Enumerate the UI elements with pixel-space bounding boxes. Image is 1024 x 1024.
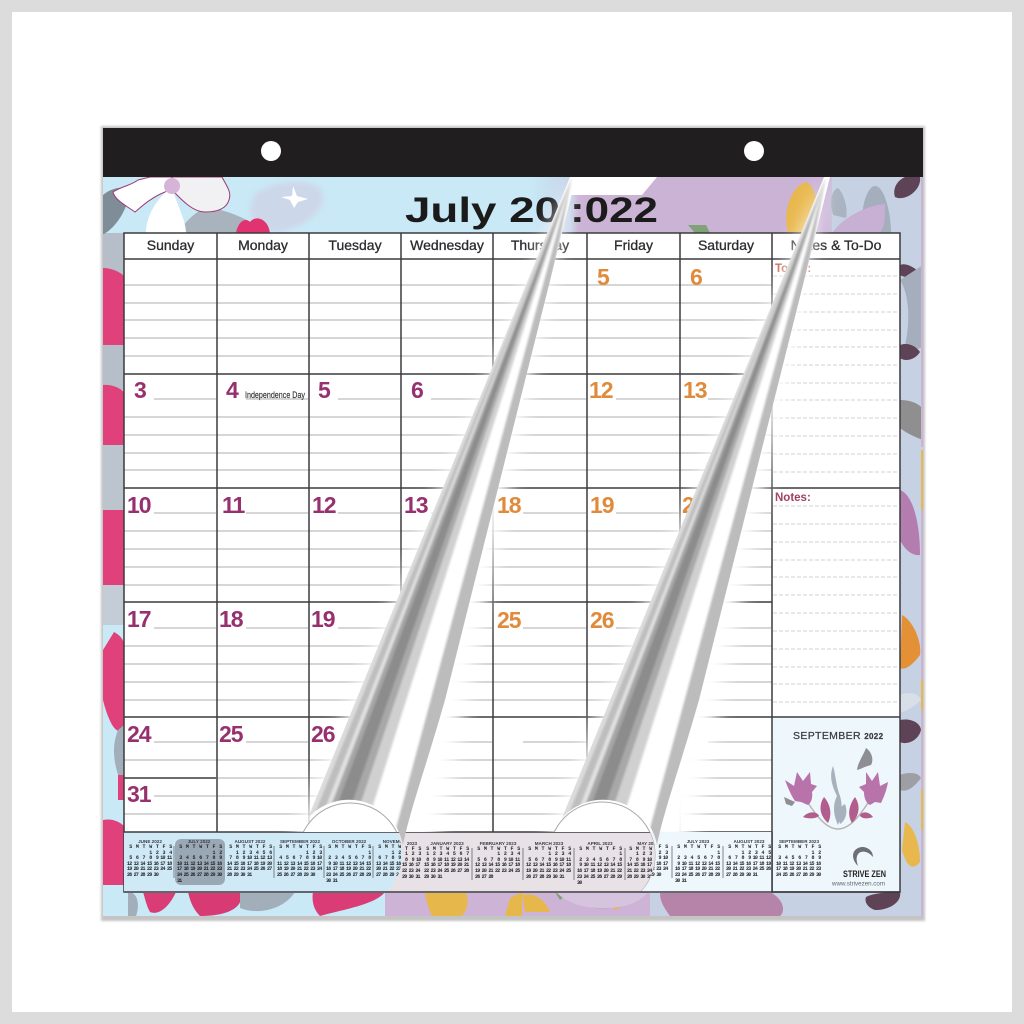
December 2022 tail: 2023 <box>407 841 418 846</box>
July highlight <box>175 839 225 885</box>
day numbers: 24 <box>127 721 152 747</box>
day numbers: 26 <box>311 721 335 747</box>
June 2022: S M T W T F S <box>127 844 172 850</box>
November 2022: 27 28 29 30 <box>376 872 401 878</box>
July 2022: 1 2 <box>177 850 222 856</box>
calendar tail before July: S M T W T F S <box>623 844 668 850</box>
March 2023: 26 27 28 29 30 31 <box>526 874 565 880</box>
November 2022 <box>376 840 401 876</box>
calendar tail before July: 18 19 20 21 22 23 24 <box>623 866 668 872</box>
January 2023: S M T W T F S <box>424 846 469 852</box>
July 2023: 2 3 4 5 6 7 8 <box>675 855 720 861</box>
Strive Zen logo: STRIVE ZEN <box>843 869 886 879</box>
October 2022: 23 24 25 26 27 28 29 <box>326 872 371 878</box>
September 2022: 25 26 27 28 29 30 <box>277 872 316 878</box>
weekday headers: Sunday <box>147 237 194 253</box>
day numbers: 25 <box>219 721 244 747</box>
strip bottom border <box>124 891 772 893</box>
March 2023: 12 13 14 15 16 17 18 <box>526 862 571 868</box>
December 2022 tail: 29 30 31 <box>402 874 421 880</box>
September 2023 mini calendar: 17 18 19 20 21 22 23 <box>776 866 821 872</box>
day numbers: 31 <box>127 781 152 807</box>
September 2022: S M T W T F S <box>277 844 322 850</box>
lens circle first curl <box>303 802 398 832</box>
September 2022: 18 19 20 21 22 23 24 <box>277 866 322 872</box>
day numbers: 17 <box>127 606 151 632</box>
August 2022: 28 29 30 31 <box>227 872 252 878</box>
day numbers: 3 <box>134 377 146 403</box>
December 2022 tail: 8 9 10 <box>405 857 421 863</box>
July 2023: 1 <box>675 850 720 856</box>
October 2022: 9 10 11 12 13 14 15 <box>326 861 371 867</box>
day numbers: 4 <box>226 377 239 403</box>
day numbers: 13 <box>404 492 428 518</box>
April 2023: 16 17 18 19 20 21 22 <box>577 868 622 874</box>
bottom margin florals <box>128 892 900 916</box>
title: July 20 <box>405 191 560 230</box>
day numbers: 11 <box>222 492 246 518</box>
January 2023: 8 9 10 11 12 13 14 <box>424 857 469 863</box>
August 2022: AUGUST 2022 <box>235 839 266 844</box>
July 2022 <box>177 839 222 884</box>
June 2022: JUNE 2022 <box>138 839 162 844</box>
July 2023: 23 24 25 26 27 28 29 <box>675 872 720 878</box>
lens circle second curl <box>549 802 655 908</box>
day numbers: 12 <box>312 492 336 518</box>
title <box>405 191 658 230</box>
title: :022 <box>570 191 658 230</box>
April 2023: 1 <box>577 851 622 857</box>
day numbers: 10 <box>127 492 151 518</box>
July 2023: 16 17 18 19 20 21 22 <box>675 866 720 872</box>
day numbers: 25 <box>497 607 522 633</box>
April 2023: 9 10 11 12 13 14 15 <box>577 862 622 868</box>
to-do and notes labels: To-Do: <box>775 263 811 275</box>
punch hole left <box>261 141 281 161</box>
black binding band <box>103 128 923 177</box>
October 2022: 2 3 4 5 6 7 8 <box>326 855 371 861</box>
January 2023: 15 16 17 18 19 20 21 <box>424 862 469 868</box>
September 2023 mini calendar: SEPTEMBER 2023 <box>779 839 819 844</box>
August 2022 <box>227 839 272 878</box>
February 2023: 12 13 14 15 16 17 18 <box>475 862 520 868</box>
October 2022: S M T W T F S <box>326 844 371 850</box>
November 2022: 20 21 22 23 <box>376 866 401 872</box>
December 2022 tail: T F S <box>405 846 421 852</box>
day numbers: 13 <box>683 377 707 403</box>
March 2023: S M T W T F S <box>526 846 571 852</box>
December 2022 tail: 22 23 24 <box>402 868 421 874</box>
April 2023: 23 24 25 26 27 28 29 <box>577 874 622 880</box>
first page curl <box>308 177 575 844</box>
August 2022: S M T W T F S <box>227 844 272 850</box>
punch hole right <box>744 141 764 161</box>
September 2022: SEPTEMBER 2022 <box>280 839 320 844</box>
day numbers: 6 <box>690 264 702 290</box>
May 2023: 21 22 23 24 <box>627 868 652 874</box>
August 2022: 21 22 23 24 25 26 27 <box>227 866 272 872</box>
September 2023 mini calendar <box>776 839 821 878</box>
April 2023: S M T W T F S <box>577 846 622 852</box>
August 2023: 13 14 15 16 17 18 19 <box>726 861 771 867</box>
August 2023: S M T W T F S <box>726 844 771 850</box>
July 2022: 31 <box>177 878 182 884</box>
day numbers: 5 <box>597 264 610 290</box>
day numbers: 20 <box>682 492 706 518</box>
left margin florals <box>103 188 130 885</box>
August 2023: 20 21 22 23 24 25 26 <box>726 866 771 872</box>
day numbers <box>127 264 707 807</box>
September 2022: 4 5 6 7 8 9 10 <box>277 855 322 861</box>
calendar tail before July: 25 26 27 28 29 30 <box>623 872 662 878</box>
December 2022 tail: 15 16 17 <box>402 862 421 868</box>
May 2023: 7 8 9 10 <box>627 857 652 863</box>
mini calendar strip: right section <box>124 832 772 893</box>
July 2022: 3 4 5 6 7 8 9 <box>177 855 222 861</box>
calendar background artwork <box>103 177 923 916</box>
mini calendar strip: pale section <box>124 832 774 893</box>
panel heading: SEPTEMBER 2022 <box>793 730 884 742</box>
August 2022: 14 15 16 17 18 19 20 <box>227 861 272 867</box>
day numbers: Independence Day <box>245 390 305 400</box>
March 2023: 5 6 7 8 9 10 11 <box>526 857 571 863</box>
September 2022 <box>277 839 322 878</box>
December 2022 tail <box>402 841 421 880</box>
October 2022: 30 31 <box>326 878 338 884</box>
May 2023: 14 15 16 17 <box>627 862 652 868</box>
day numbers: 12 <box>589 377 613 403</box>
February 2023: 1 2 3 4 <box>475 851 520 857</box>
day numbers: 5 <box>318 377 331 403</box>
calendar tail before July <box>623 844 668 878</box>
September panel <box>772 718 900 892</box>
top-left white flower <box>113 177 308 233</box>
June 2022: 26 27 28 29 30 <box>127 872 159 878</box>
September 2023 mini calendar: 3 4 5 6 7 8 9 <box>776 855 821 861</box>
September 2023 mini calendar: 24 25 26 27 28 29 30 <box>776 872 821 878</box>
October 2022: 1 <box>326 850 371 856</box>
July 2022: 17 18 19 20 21 22 23 <box>177 866 222 872</box>
calendar tail before July: 11 12 13 14 15 16 17 <box>623 861 668 867</box>
calendar grid page <box>124 233 900 892</box>
February 2023: FEBRUARY 2023 <box>480 841 517 846</box>
to-do and notes labels: Notes: <box>775 492 811 504</box>
February 2023: 26 27 28 <box>475 874 494 880</box>
May 2023: 1 2 3 <box>627 851 652 857</box>
November 2022: S M T W <box>376 844 401 850</box>
day numbers: 18 <box>219 606 244 632</box>
July 2023: 30 31 <box>675 878 687 884</box>
June 2022: 5 6 7 8 9 10 11 <box>127 855 172 861</box>
July 2023: JULY 2023 <box>687 839 710 844</box>
March 2023: MARCH 2023 <box>535 841 564 846</box>
ruled lines <box>124 285 772 814</box>
July 2023: S M T W T F S <box>675 844 720 850</box>
November 2022: NOVEMBER <box>383 839 410 844</box>
October 2022: 16 17 18 19 20 21 22 <box>326 866 371 872</box>
weekday headers: Notes & To-Do <box>791 237 882 253</box>
August 2023: 1 2 3 4 5 <box>726 850 771 856</box>
May 2023: S M T W <box>627 846 652 852</box>
August 2022: 7 8 9 10 11 12 13 <box>227 855 272 861</box>
January 2023: 29 30 31 <box>424 874 443 880</box>
May 2023 <box>627 842 654 878</box>
August 2023: 27 28 29 30 31 <box>726 872 758 878</box>
weekday headers: Friday <box>614 237 653 253</box>
November 2022: 13 14 15 16 <box>376 861 401 867</box>
notes dashed lines <box>773 276 899 702</box>
February 2023: S M T W T F S <box>475 846 520 852</box>
September 2022: 1 2 3 <box>277 850 322 856</box>
weekday headers: Tuesday <box>328 237 382 253</box>
September 2023 mini calendar: 10 11 12 13 14 15 16 <box>776 861 821 867</box>
July 2022: 24 25 26 27 28 29 30 <box>177 872 222 878</box>
November 2022: 6 7 8 9 <box>376 855 401 861</box>
day numbers: 18 <box>497 492 522 518</box>
June 2022: 12 13 14 15 16 17 18 <box>127 861 172 867</box>
November 2022: 1 2 <box>376 850 401 856</box>
January 2023: 22 23 24 25 26 27 28 <box>424 868 469 874</box>
October 2022 <box>326 839 371 884</box>
June 2022: 19 20 21 22 23 24 25 <box>127 866 172 872</box>
September 2022: 11 12 13 14 15 16 17 <box>277 861 322 867</box>
January 2023: 1 2 3 4 5 6 7 <box>424 851 469 857</box>
January 2023 <box>424 841 469 880</box>
calendar tail before July: 4 5 6 7 8 9 10 <box>623 855 668 861</box>
July 2022: S M T W T F S <box>177 844 222 850</box>
day numbers: 26 <box>590 607 614 633</box>
March 2023: 1 2 3 4 <box>526 851 571 857</box>
Strive Zen logo <box>831 847 886 888</box>
October 2022: OCTOBER 2022 <box>332 839 367 844</box>
July 2022: JULY 2022 <box>188 839 211 844</box>
weekday headers: Thursday <box>511 237 569 253</box>
weekday headers: Wednesday <box>410 237 484 253</box>
day numbers: 6 <box>411 377 423 403</box>
June 2022: 1 2 3 4 <box>127 850 172 856</box>
December 2022 tail: 1 2 3 <box>405 851 421 857</box>
April 2023: 30 <box>577 880 582 886</box>
February 2023 <box>475 841 520 880</box>
July 2023: 9 10 11 12 13 14 15 <box>675 861 720 867</box>
grid lines <box>124 233 900 892</box>
March 2023 <box>526 841 571 880</box>
August 2023: 6 7 8 9 10 11 12 <box>726 855 771 861</box>
February 2023: 5 6 7 8 9 10 11 <box>475 857 520 863</box>
April 2023: APRIL 2023 <box>587 841 613 846</box>
August 2022: 1 2 3 4 5 6 <box>227 850 272 856</box>
February 2023: 19 20 21 22 23 24 25 <box>475 868 520 874</box>
January 2023: JANUARY 2023 <box>430 841 464 846</box>
weekday headers <box>147 237 882 253</box>
weekday headers: Saturday <box>698 237 754 253</box>
May 2023: MAY 2023 <box>637 841 659 846</box>
to-do and notes labels <box>775 263 811 504</box>
March 2023: 19 20 21 22 23 24 25 <box>526 868 571 874</box>
day numbers: 19 <box>311 606 335 632</box>
May 2023: 28 29 30 31 <box>627 874 652 880</box>
June 2022 <box>127 839 172 878</box>
July 2022: 10 11 12 13 14 15 16 <box>177 861 222 867</box>
floral illustration <box>784 748 888 829</box>
September 2023 mini calendar: S M T W T F S <box>776 844 821 850</box>
calendar shadow <box>101 126 925 921</box>
calendar tail before July: 1 2 3 <box>623 850 668 856</box>
second page curl <box>562 177 830 844</box>
April 2023 <box>577 841 622 886</box>
July 2023 <box>675 839 720 884</box>
right margin florals <box>900 177 923 916</box>
Strive Zen logo: www.strivezen.com <box>831 880 885 888</box>
September 2023 mini calendar: 1 2 <box>776 850 821 856</box>
white fade around page curls <box>288 177 826 850</box>
August 2023 <box>726 839 771 878</box>
April 2023: 2 3 4 5 6 7 8 <box>577 857 622 863</box>
weekday headers: Monday <box>238 237 288 253</box>
August 2023: AUGUST 2023 <box>734 839 765 844</box>
day numbers: 19 <box>590 492 614 518</box>
